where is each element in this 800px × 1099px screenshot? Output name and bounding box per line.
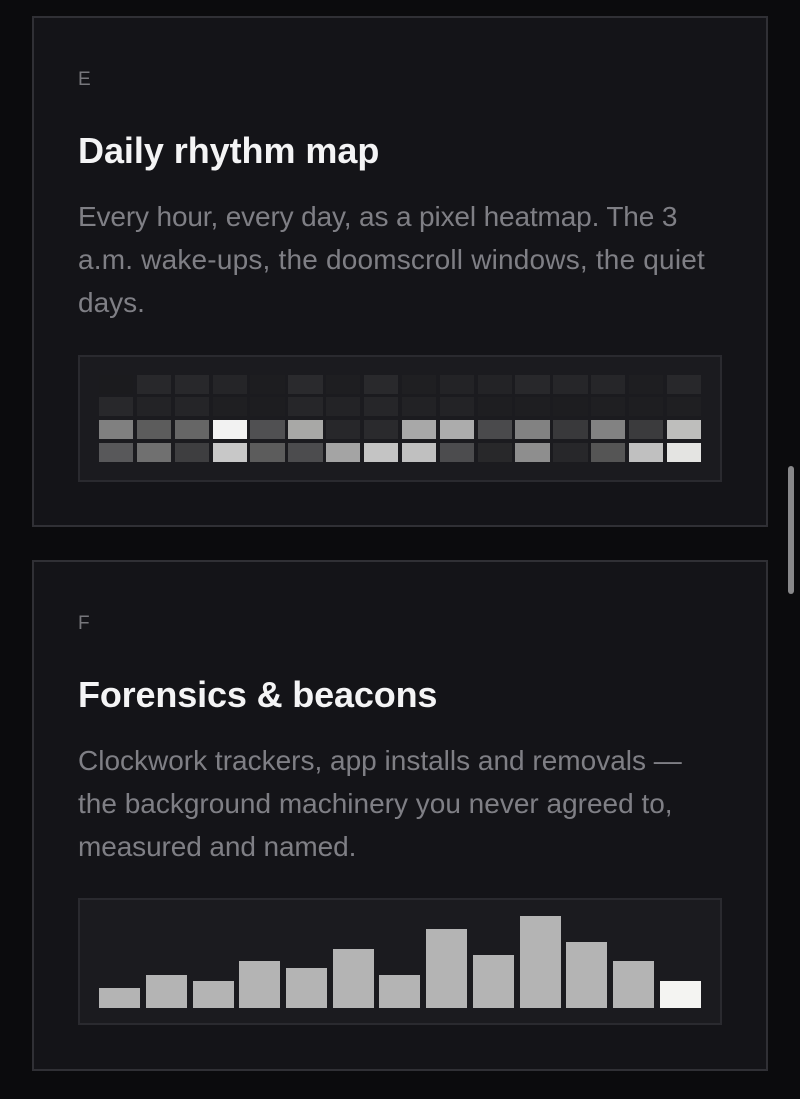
- section letter F: F: [78, 613, 90, 634]
- panel: daily rhythm map: [32, 16, 768, 527]
- section letter E: E: [78, 69, 91, 90]
- description: daily rhythm map: a.m. wake-ups, the doomscroll windows, the quiet: [78, 244, 705, 275]
- description: daily rhythm map: [78, 200, 705, 318]
- bar chart: [78, 898, 722, 1025]
- description: forensics and beacons: the background machinery you never agreed to,: [78, 788, 673, 819]
- heatmap chart: [78, 355, 722, 482]
- description: forensics and beacons: [78, 744, 682, 862]
- description: forensics and beacons: measured and named.: [78, 831, 356, 862]
- panel: forensics and beacons: [32, 560, 768, 1071]
- description: daily rhythm map: days.: [78, 287, 145, 318]
- heading: daily rhythm map: Daily rhythm map: [78, 130, 379, 171]
- description: forensics and beacons: Clockwork trackers, app installs and removals —: [78, 744, 682, 776]
- scrollbar thumb: [788, 466, 794, 594]
- description: daily rhythm map: Every hour, every day, as a pixel heatmap. The 3: [78, 200, 677, 232]
- heading: forensics and beacons: Forensics & beacons: [78, 674, 437, 715]
